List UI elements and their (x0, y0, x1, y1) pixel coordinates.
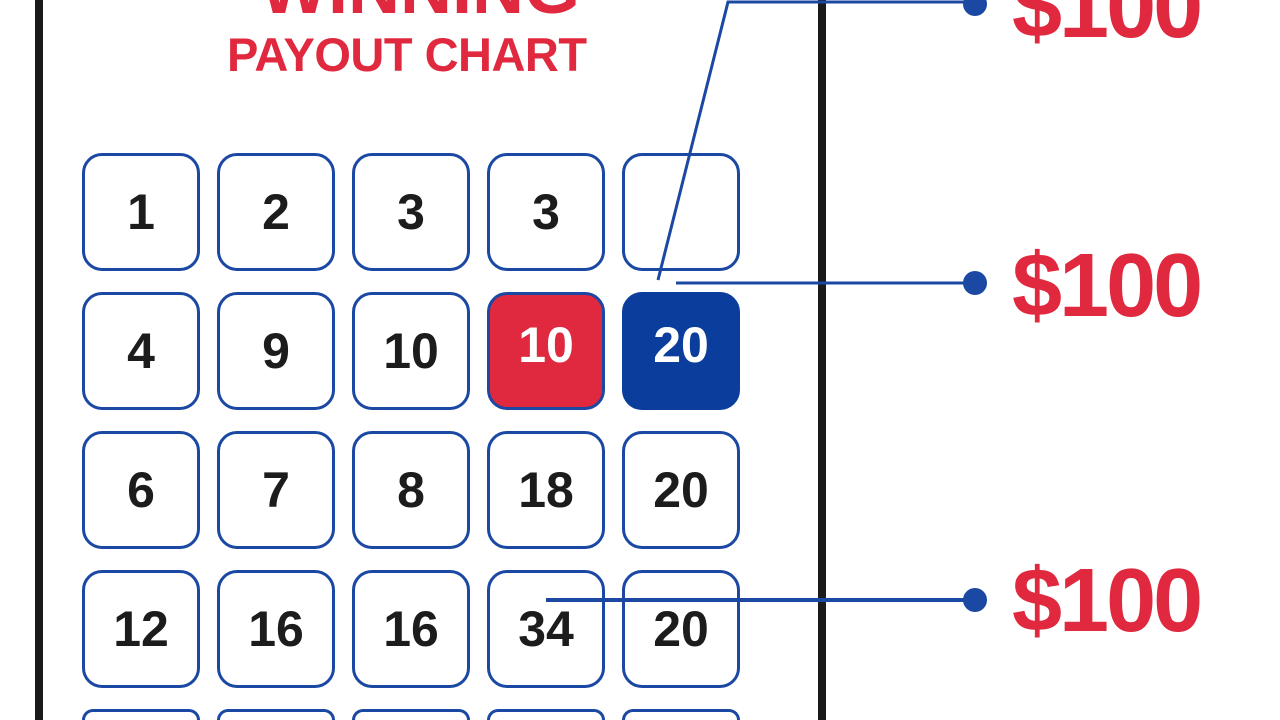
number grid: 16 (248, 601, 304, 657)
number grid: 4 (127, 323, 155, 379)
number grid: 20 (653, 317, 709, 373)
number grid: 6 (127, 462, 155, 518)
number grid: 10 (383, 323, 439, 379)
number grid: 1 (127, 184, 155, 240)
payout amount bottom: $100 (1012, 551, 1200, 651)
number grid: 16 (383, 601, 439, 657)
number grid: 12 (113, 601, 169, 657)
number grid: 34 (518, 601, 574, 657)
number grid: 9 (262, 323, 290, 379)
subtitle: PAYOUT CHART: PAYOUT CHART (227, 28, 587, 81)
number grid: 7 (262, 462, 290, 518)
number grid: 2 (262, 184, 290, 240)
number grid: 20 (653, 601, 709, 657)
payout amount middle: $100 (1012, 236, 1200, 336)
number grid: 8 (397, 462, 425, 518)
number grid: 3 (397, 184, 425, 240)
number grid: 3 (532, 184, 560, 240)
number grid: 20 (653, 462, 709, 518)
number grid: 18 (518, 462, 574, 518)
panel: payout card frame (35, 0, 826, 720)
number grid: 10 (518, 317, 574, 373)
number grid (82, 153, 740, 720)
